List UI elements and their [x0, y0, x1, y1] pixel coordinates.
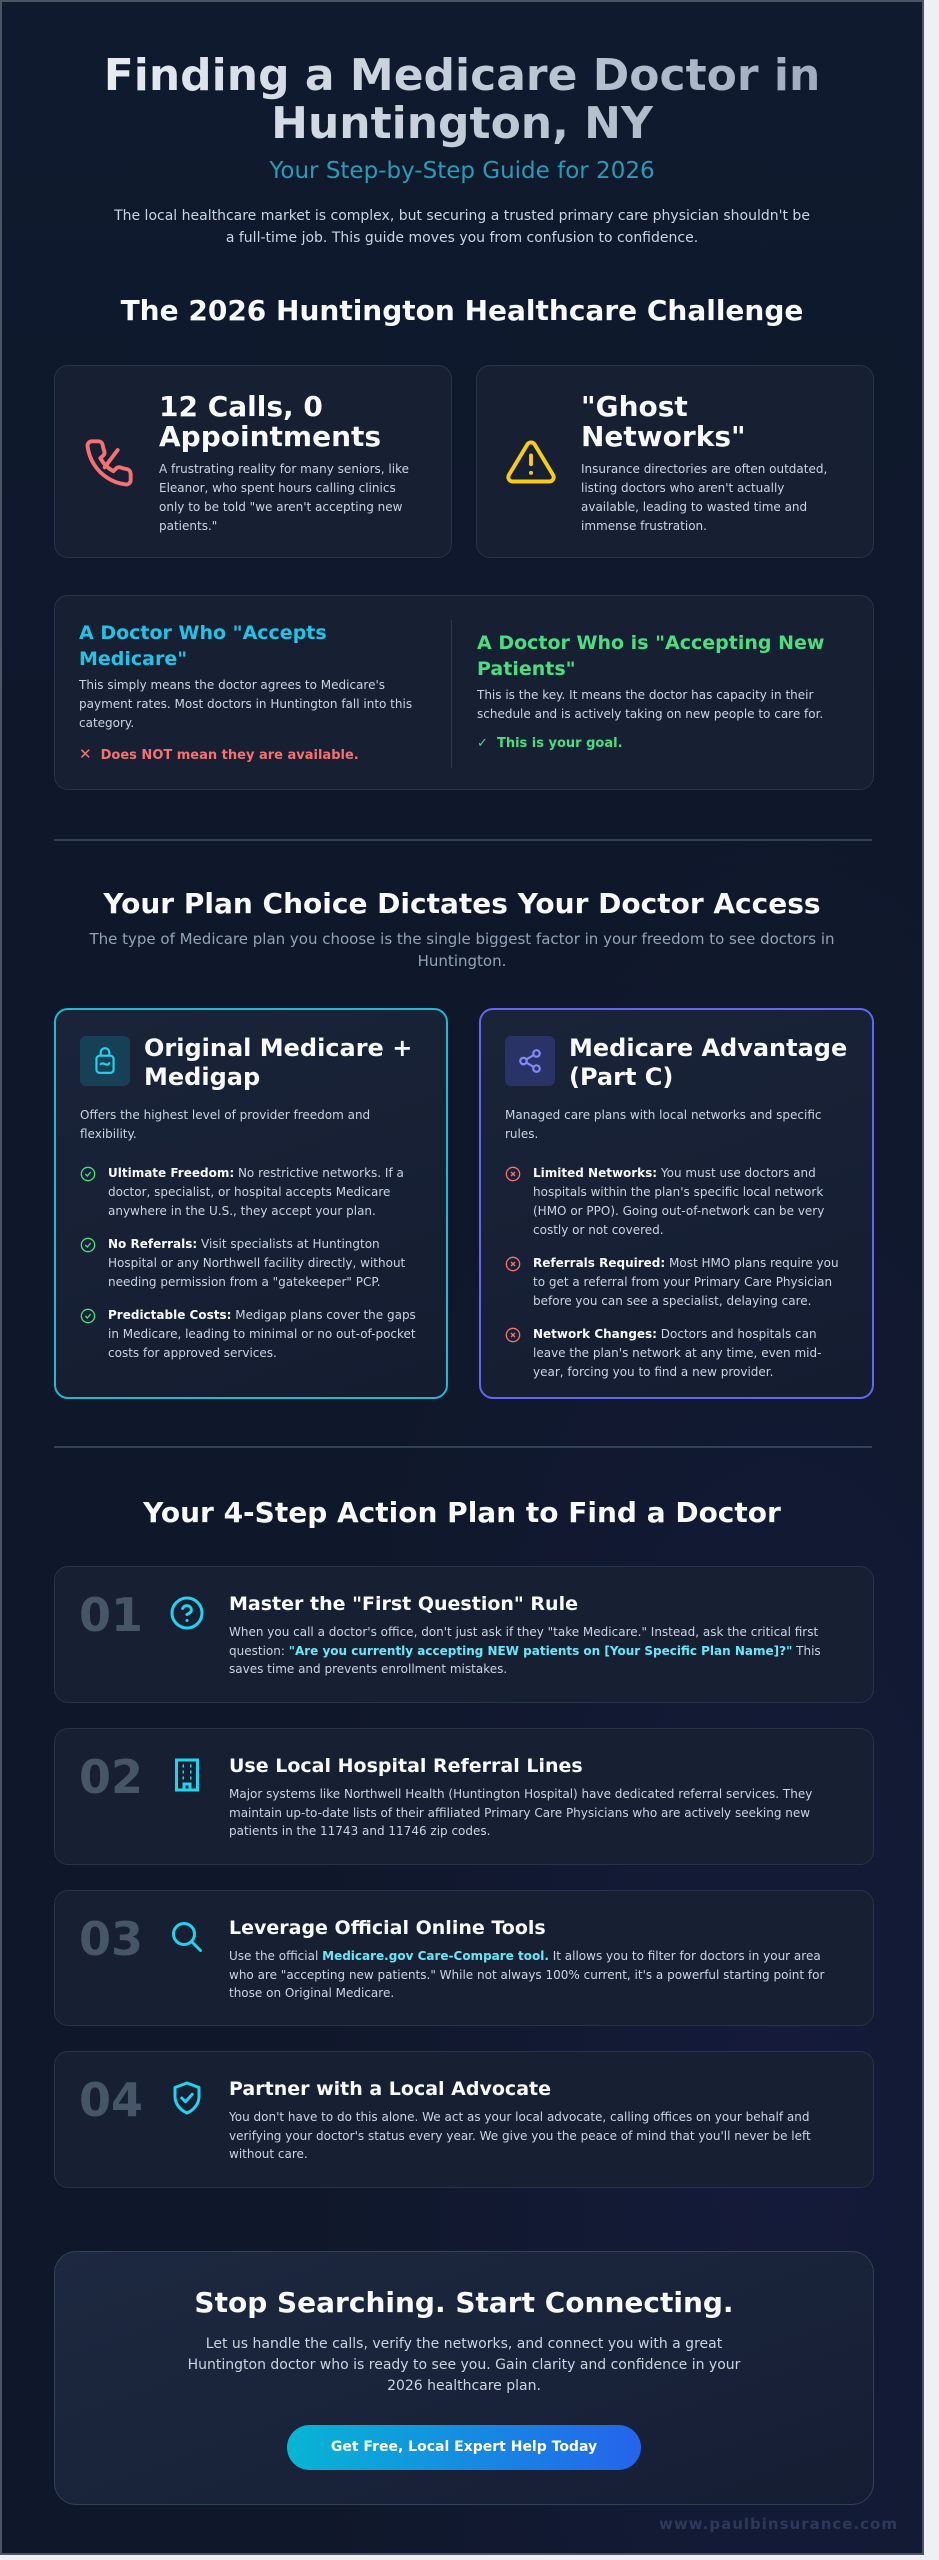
plan title: Original Medicare +: [144, 1034, 412, 1062]
column: accepting new patients: This is the key. It means the doctor has capacity in their schedule and is actively taking on new people to care for.: [477, 688, 823, 721]
title: [2, 52, 922, 148]
plan description: Managed care plans with local networks and specific rules.: [505, 1108, 821, 1141]
icon: question: [170, 1596, 204, 1630]
step 04: You don't have to do this alone. We act as your local advocate, calling offices on your behalf and verifying your doctor's status every year. We give you the peace of mind that you'll never be left without care.: [229, 2110, 811, 2161]
step 02: Major systems like Northwell Health (Huntington Hospital) have dedicated referral services. They maintain up-to-date lists of their affiliated Primary Care Physicians who are actively seeking new patients in the 11743 and 11746 zip codes.: [229, 1787, 812, 1838]
column: accepts medicare: A Doctor Who "Accepts Medicare": [79, 622, 327, 670]
step 02: Use Local Hospital Referral Lines: [229, 1755, 583, 1777]
step 02: [54, 1728, 874, 1865]
card: ghost networks: [476, 365, 874, 558]
card text: 12 Calls, 0 Appointments: [159, 390, 381, 453]
card text: Insurance directories are often outdated, listing doctors who aren't actually available, leading to wasted time and immense frustration.: [581, 462, 827, 533]
cta text: [188, 2336, 740, 2394]
step 03: 03: [79, 1912, 143, 1966]
drawbacks list: Referrals Required: Most HMO plans require you to get a referral from your Primary Care Physician before you can see a specialist, delaying care.: [533, 1256, 839, 1308]
step 01: When you call a doctor's office, don't just ask if they "take Medicare." Instead, ask the critical first question: "Are you currently accepting NEW patients on [Your Specific Plan Name]?" This saves time and prevents enrollment mistakes.: [229, 1625, 821, 1676]
step 01: Master the "First Question" Rule: [229, 1593, 578, 1615]
column: accepts medicare: ✕ Does NOT mean they are available.: [79, 745, 359, 763]
subtitle: Your Step-by-Step Guide for 2026: [269, 158, 655, 184]
title: Huntington, NY: [271, 98, 653, 149]
column: accepting new patients: [476, 632, 824, 751]
step 04: Partner with a Local Advocate: [229, 2078, 551, 2100]
panel: medicare advantage: [479, 1008, 874, 1399]
icon: lock: [80, 1036, 130, 1086]
title: Finding a Medicare Doctor in: [104, 50, 820, 101]
card text: [159, 390, 409, 533]
plan title: Medigap: [144, 1063, 260, 1091]
card text: A frustrating reality for many seniors, like Eleanor, who spent hours calling clinics only to be told "we aren't accepting new patients.": [159, 462, 409, 533]
step 02: 02: [79, 1750, 143, 1804]
plan title: Medicare Advantage: [569, 1034, 847, 1062]
benefits list: Predictable Costs: Medigap plans cover the gaps in Medicare, leading to minimal or no out-of-pocket costs for approved services.: [108, 1308, 416, 1360]
step 04: [54, 2051, 874, 2188]
card text: [581, 390, 827, 533]
step 01: 01: [79, 1588, 143, 1642]
drawbacks list: [506, 1166, 839, 1379]
plan title: (Part C): [569, 1063, 673, 1091]
column: accepting new patients: A Doctor Who is "Accepting New Patients": [477, 632, 824, 680]
panel: accepts vs accepting: [54, 595, 874, 790]
heading: challenge: The 2026 Huntington Healthcare Challenge: [121, 294, 803, 327]
drawbacks list: Limited Networks: You must use doctors and hospitals within the plan's specific local network (HMO or PPO). Going out-of-network can be very costly or not covered.: [533, 1166, 824, 1237]
icon: building: [175, 1758, 199, 1792]
cta button: [287, 2425, 641, 2470]
plan title: [569, 1034, 847, 1091]
cta text: Huntington doctor who is ready to see you. Gain clarity and confidence in your 2026 healthcare plan.: [188, 2357, 740, 2394]
step 04: 04: [79, 2073, 143, 2127]
icon: search: [172, 1922, 202, 1952]
card text: "Ghost Networks": [581, 390, 746, 453]
intro text: The local healthcare market is complex, but securing a trusted primary care physician shouldn't be a full-time job. This guide moves you from confusion to confidence.: [114, 208, 810, 246]
heading: plan choice: Your Plan Choice Dictates Your Doctor Access: [103, 887, 821, 920]
icon: phone missed: [86, 439, 133, 486]
plan subtitle: The type of Medicare plan you choose is the single biggest factor in your freedom to see doctors in Huntington.: [89, 930, 835, 970]
benefits list: No Referrals: Visit specialists at Huntington Hospital or any Northwell facility directly, without needing permission from a "gatekeeper" PCP.: [108, 1237, 405, 1289]
step 03: Leverage Official Online Tools: [229, 1917, 546, 1939]
column: accepts medicare: [78, 622, 412, 763]
cta text: Let us handle the calls, verify the networks, and connect you with a great: [206, 2336, 722, 2352]
panel: original medicare: [54, 1008, 448, 1399]
column: accepting new patients: ✓ This is your goal.: [477, 736, 623, 751]
step 01: [54, 1566, 874, 1703]
icon: warning: [506, 440, 556, 484]
footer url: www.paulbinsurance.com: [659, 2515, 898, 2533]
card: 12 calls: [54, 365, 452, 558]
plan title: [144, 1034, 412, 1091]
cta button: Get Free, Local Expert Help Today: [331, 2439, 597, 2455]
drawbacks list: Network Changes: Doctors and hospitals can leave the plan's network at any time, even mid-year, forcing you to find a new provider.: [533, 1327, 821, 1379]
benefits list: Ultimate Freedom: No restrictive networks. If a doctor, specialist, or hospital accepts Medicare anywhere in the U.S., they accept your plan.: [108, 1166, 404, 1218]
plan description: Offers the highest level of provider freedom and flexibility.: [80, 1108, 370, 1141]
column: accepts medicare: This simply means the doctor agrees to Medicare's payment rates. Most doctors in Huntington fall into this category.: [79, 678, 412, 730]
heading: 4-step plan: Your 4-Step Action Plan to Find a Doctor: [143, 1496, 781, 1529]
step 03: Use the official Medicare.gov Care-Compare tool. It allows you to filter for doctors in your area who are "accepting new patients." While not always 100% current, it's a powerful starting point for those on Original Medicare.: [229, 1949, 824, 2000]
cta heading: Stop Searching. Start Connecting.: [194, 2286, 734, 2319]
panel: call to action: [54, 2251, 874, 2505]
icon: share network: [505, 1036, 555, 1086]
step 03: [54, 1890, 874, 2026]
benefits list: [80, 1166, 416, 1360]
icon: shield check: [174, 2082, 200, 2114]
